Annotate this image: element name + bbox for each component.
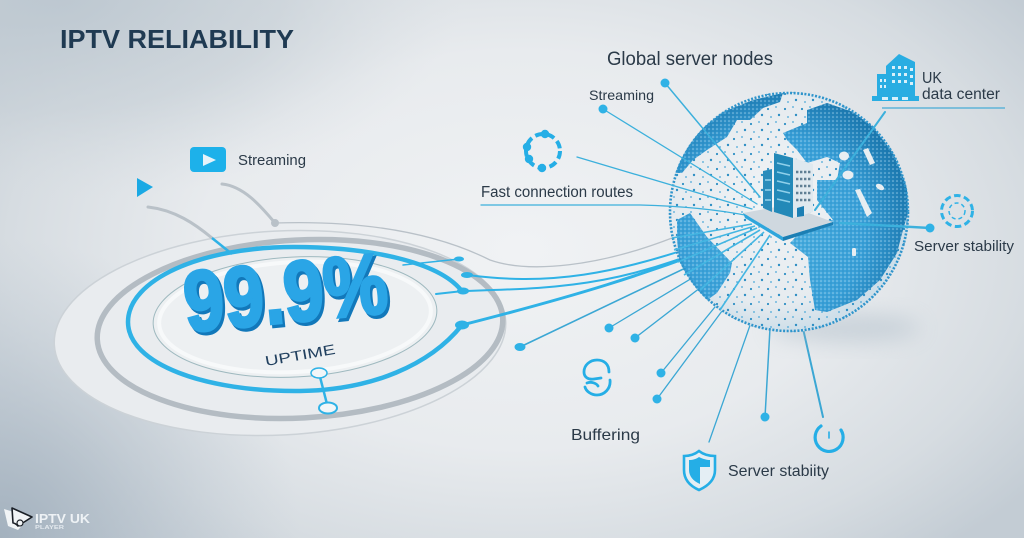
continents — [673, 93, 908, 312]
server stability label: Server stability — [914, 238, 1014, 255]
logo: PLAYER — [35, 525, 65, 531]
icon: connection ring — [523, 130, 560, 172]
metric: 99.9%: 99.9% — [179, 236, 392, 351]
UK data center label — [882, 70, 1005, 108]
streaming label with play icon: Streaming — [238, 152, 306, 169]
fan lines over globe — [672, 224, 770, 310]
streaming label with play icon — [190, 147, 306, 172]
UK data center label: UK — [922, 70, 943, 87]
uptime label: UPTIME — [264, 341, 336, 369]
inner plate — [150, 250, 440, 384]
icon: play triangle — [137, 178, 153, 197]
inner highlight — [156, 255, 434, 379]
blue link from streaming curve to dial — [212, 238, 232, 254]
icon: buffering — [584, 360, 610, 395]
outer thin ring — [49, 219, 511, 447]
icon: UK data center — [872, 54, 919, 101]
connector nodes — [311, 368, 337, 414]
fast connection routes label: Fast connection routes — [481, 184, 633, 201]
icon: power — [815, 426, 843, 451]
connection routes to dial — [403, 224, 823, 442]
buffering label: Buffering — [571, 427, 640, 444]
server stabiity label: Server stabiity — [728, 463, 829, 480]
inland gaps — [839, 148, 885, 256]
grey ring — [93, 229, 507, 429]
grey connector curves — [148, 184, 672, 267]
UK data center label: data center — [922, 86, 1000, 103]
blue ring — [128, 247, 462, 391]
central data center building — [743, 153, 833, 241]
logo — [4, 508, 91, 531]
icon: dashed ring — [942, 196, 972, 226]
metric: 99.9%: 99.9% — [182, 238, 394, 354]
icon: shield — [684, 451, 715, 490]
title: IPTV RELIABILITY — [60, 24, 294, 54]
uptime dial — [49, 219, 511, 447]
global server nodes label: Global server nodes — [607, 49, 773, 70]
globe — [669, 92, 909, 332]
globe shadow — [770, 314, 920, 342]
logo: IPTV UK — [35, 511, 91, 526]
streaming label: Streaming — [589, 87, 654, 103]
globe leader lines — [481, 78, 934, 232]
